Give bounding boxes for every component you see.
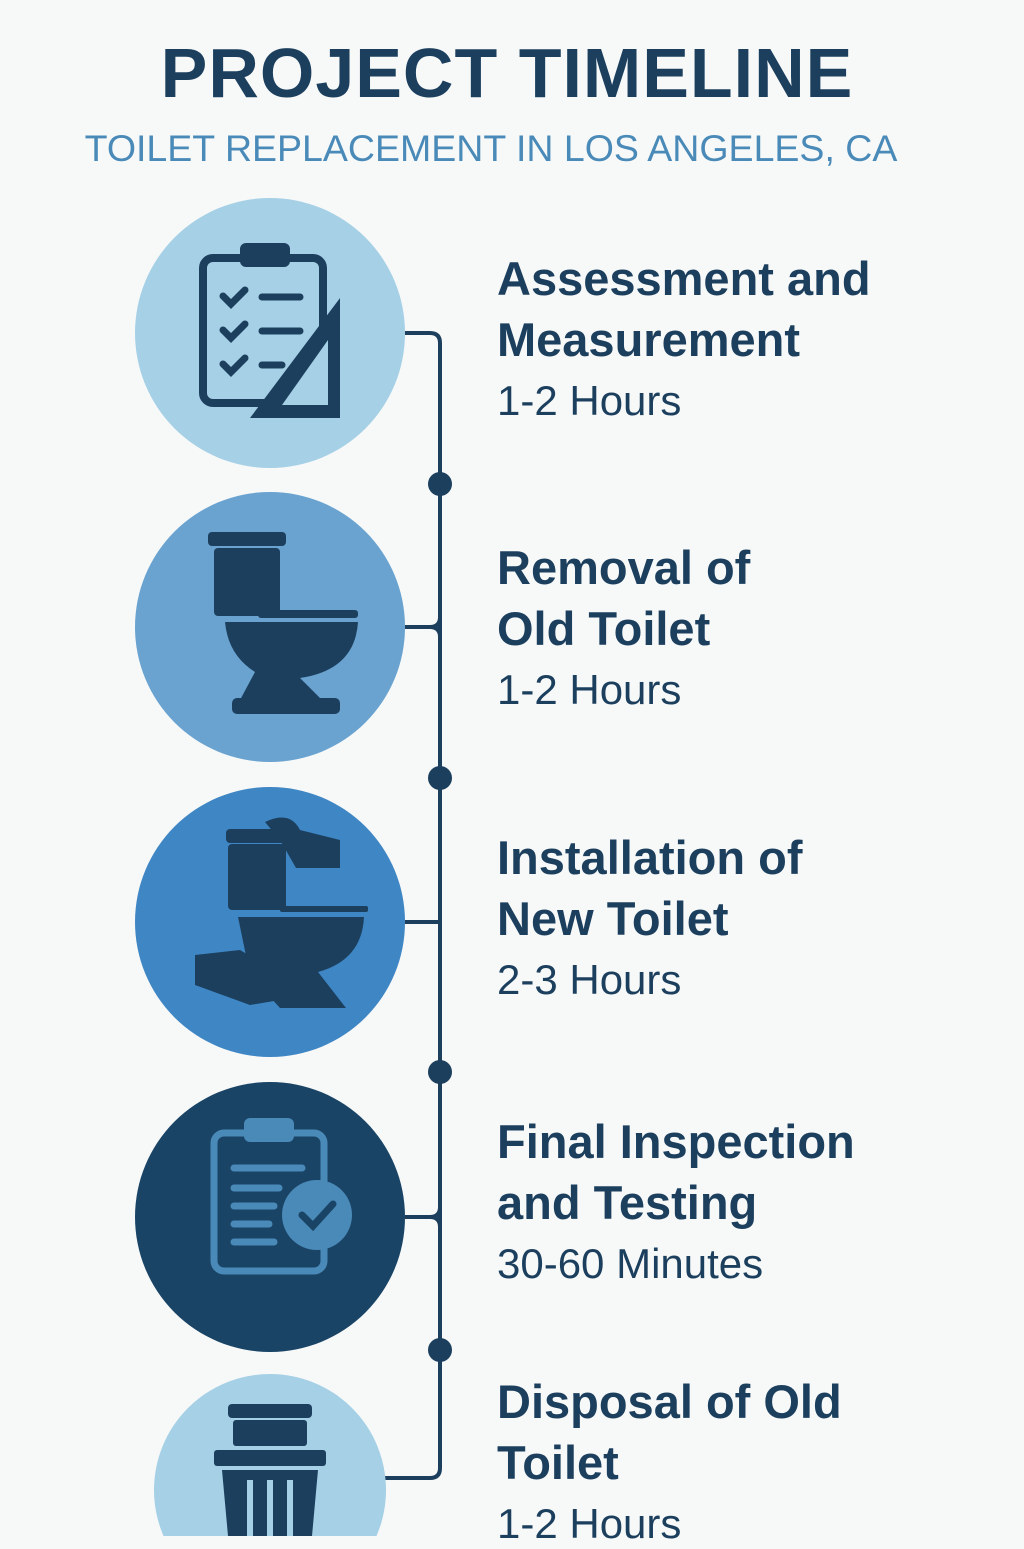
step 4 text	[497, 1115, 855, 1287]
step 2 text: Removal of	[497, 541, 750, 594]
step 4 text: and Testing	[497, 1176, 757, 1229]
step 2 text: Old Toilet	[497, 602, 710, 655]
step 1 text: 1-2 Hours	[497, 377, 681, 424]
step 3 text: 2-3 Hours	[497, 956, 681, 1003]
step 5 text: 1-2 Hours	[497, 1500, 681, 1547]
step 1 text	[497, 252, 871, 424]
step 5 text	[497, 1375, 842, 1547]
step 2 text	[497, 541, 750, 713]
step 4 text: Final Inspection	[497, 1115, 855, 1168]
step 4 text: 30-60 Minutes	[497, 1240, 763, 1287]
timeline dots	[428, 472, 452, 1362]
icon: toilet	[135, 492, 405, 762]
icon: trash bin	[154, 1374, 386, 1549]
timeline line	[385, 333, 440, 1478]
step 5 text: Disposal of Old	[497, 1375, 842, 1428]
step 3 text: New Toilet	[497, 892, 729, 945]
icon: installation hands	[135, 787, 405, 1057]
step 2 text: 1-2 Hours	[497, 666, 681, 713]
icon: clipboard and ruler	[135, 198, 405, 468]
step 3 text	[497, 831, 803, 1003]
step 5 text: Toilet	[497, 1436, 619, 1489]
step 1 text: Assessment and	[497, 252, 871, 305]
step 1 text: Measurement	[497, 313, 800, 366]
subtitle: TOILET REPLACEMENT IN LOS ANGELES, CA	[85, 127, 897, 169]
step 3 text: Installation of	[497, 831, 802, 884]
icon: inspection clipboard	[135, 1082, 405, 1352]
title: PROJECT TIMELINE	[161, 34, 853, 112]
